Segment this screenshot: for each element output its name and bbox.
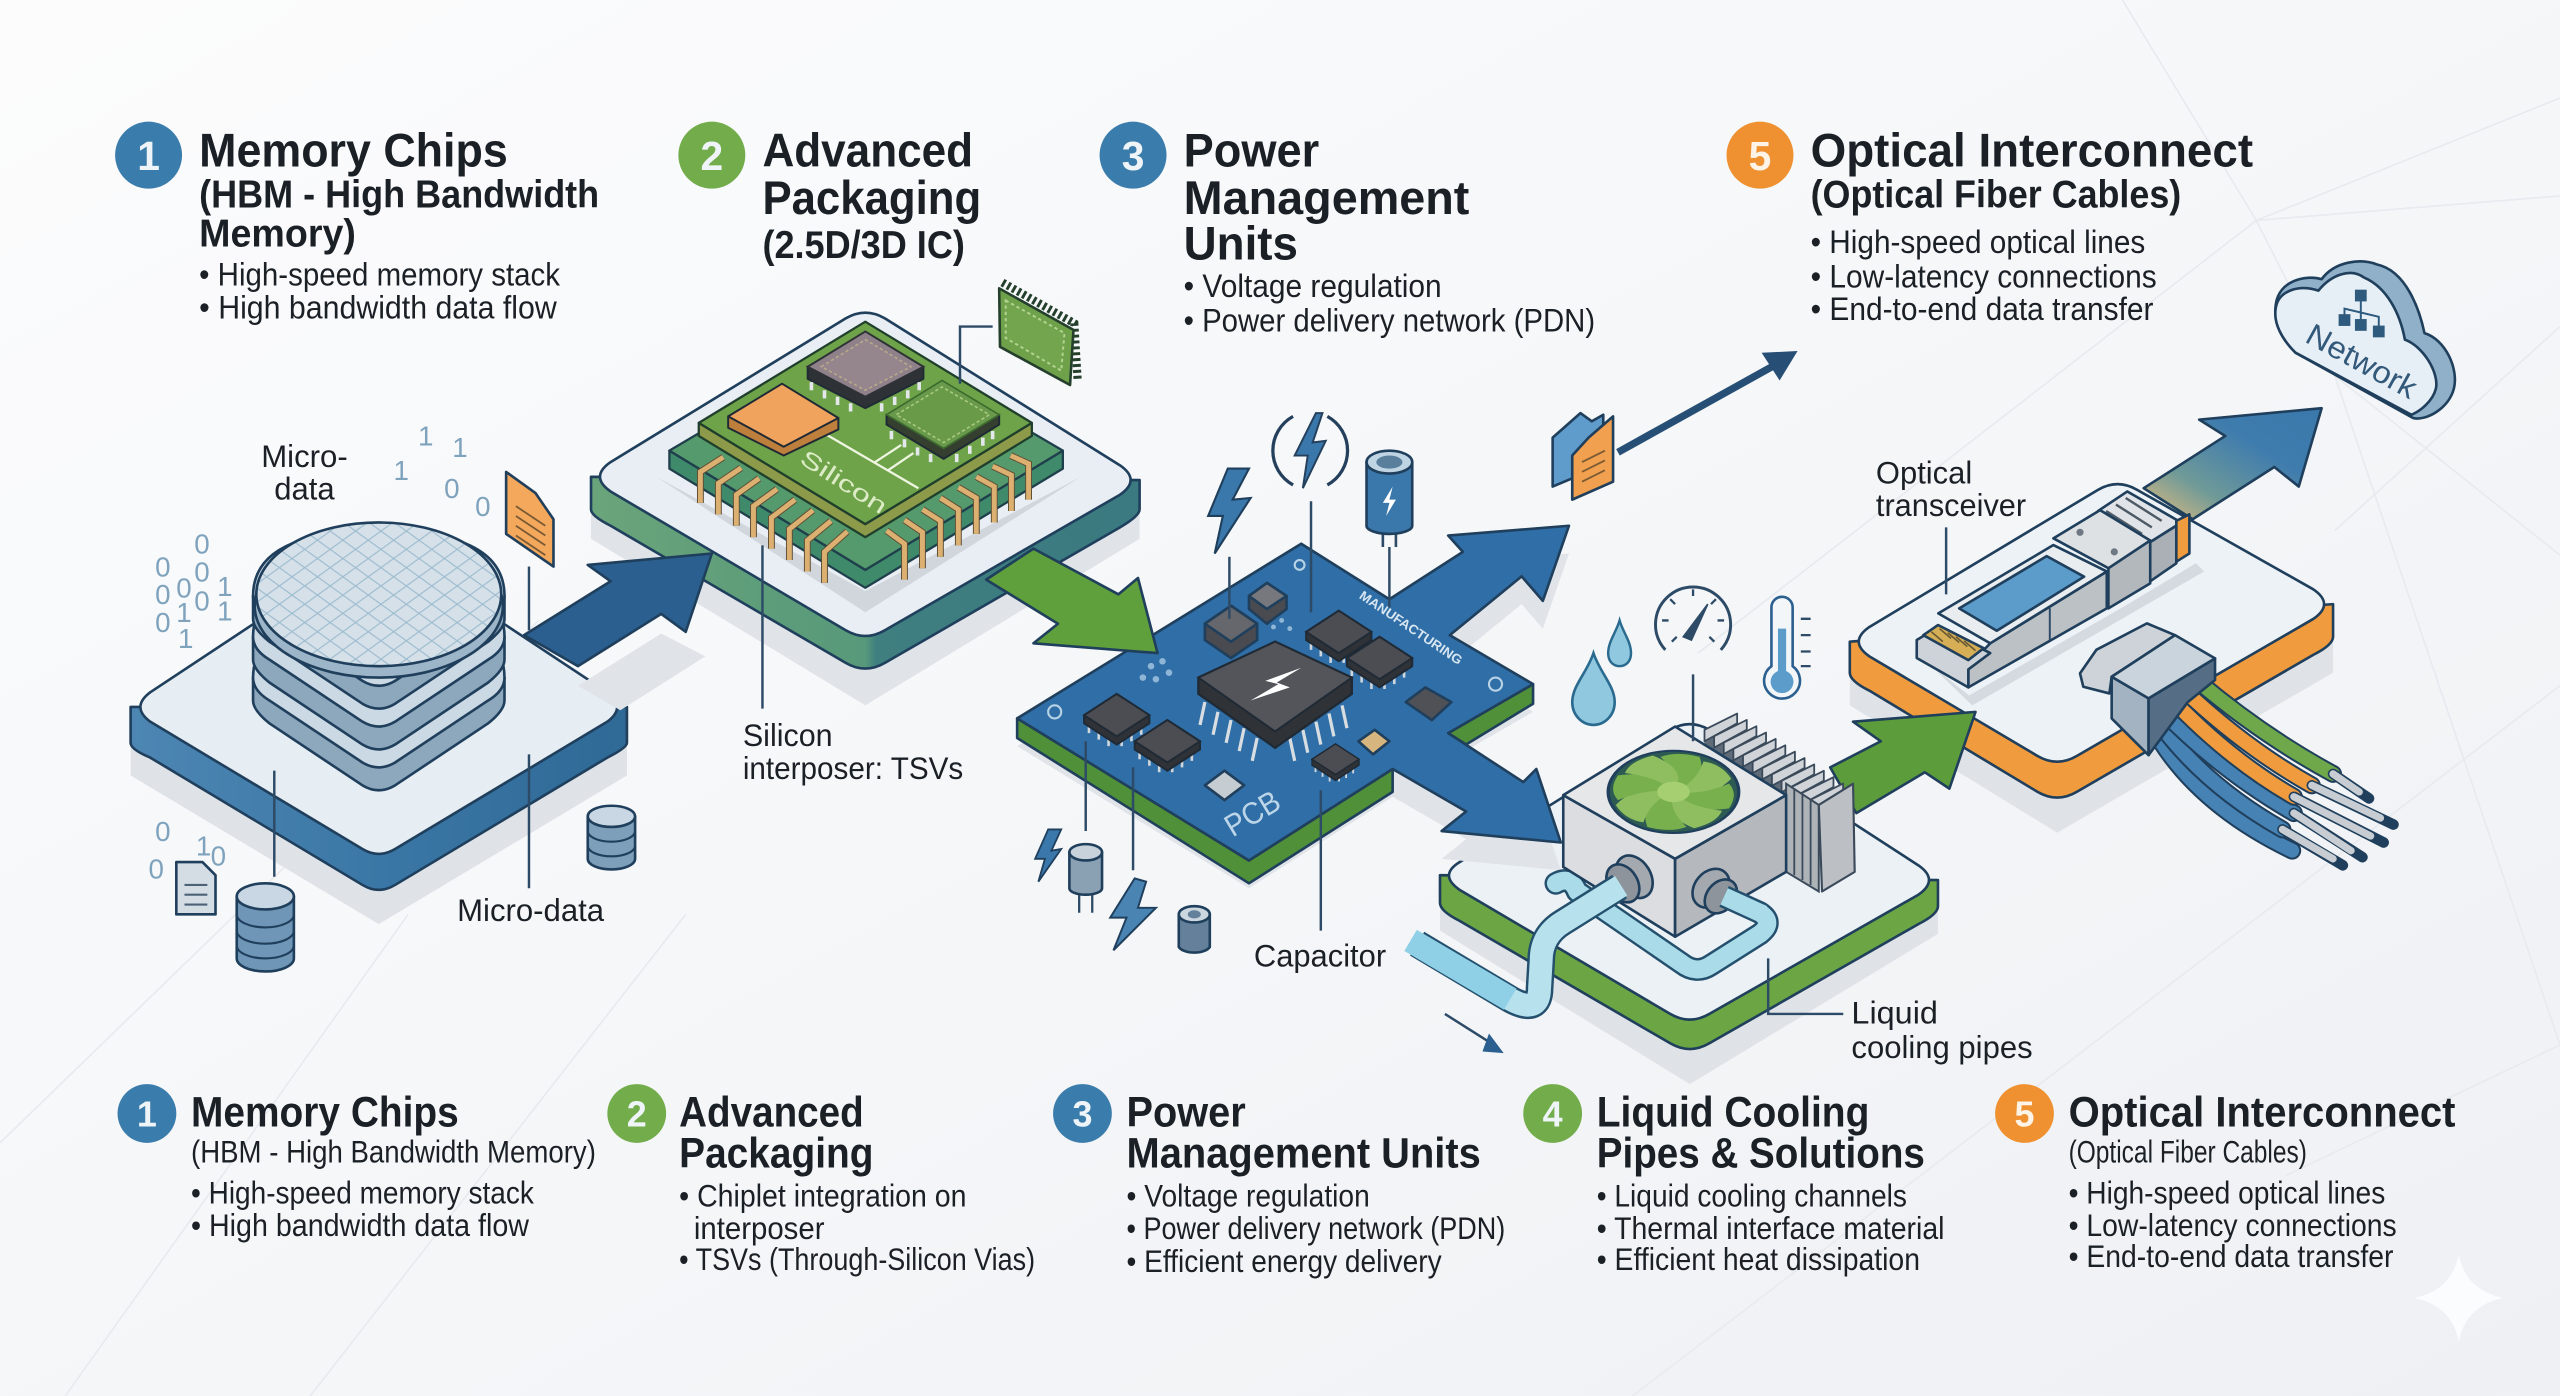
- top heading 1: memory chips: Memory): [199, 213, 356, 256]
- top heading 5: optical interconnect: [1727, 122, 2253, 327]
- legend 4: liquid cooling: [1523, 1084, 1944, 1277]
- binary digits: 0: [149, 853, 164, 884]
- network tree glyph: [2340, 291, 2384, 336]
- icon: small green chip: [999, 282, 1078, 385]
- binary digits: 1: [217, 571, 233, 602]
- pcb small chips: [1084, 611, 1412, 782]
- binary digits: 1: [178, 623, 193, 654]
- arrow: to optical interconnect: [1618, 351, 1798, 452]
- icon: gray document: [176, 862, 216, 914]
- legend badge 2: [607, 1084, 666, 1143]
- legend 1: memory chips: • High bandwidth data flow: [191, 1208, 530, 1243]
- top heading 1: memory chips: [115, 122, 599, 325]
- legend 1: memory chips: [118, 1084, 596, 1243]
- icon: database right: [588, 806, 635, 869]
- top heading 2: advanced packaging: Packaging: [762, 172, 981, 225]
- pcb cube components: [1205, 583, 1451, 800]
- binary digits: 1: [217, 595, 233, 626]
- pipes: liquid cooling tubes: [1556, 881, 1767, 969]
- binary digits: 0: [194, 529, 210, 560]
- diagram label: optical transceiver: [1876, 455, 2026, 523]
- fibers: [2162, 681, 2333, 851]
- top heading 1: memory chips: • High bandwidth data flow: [199, 288, 557, 325]
- icon: gauge: [1656, 587, 1731, 650]
- panel: memory chips platform: [131, 547, 627, 924]
- arrow: cooling to optical: [1830, 712, 1976, 813]
- pcb mounting holes: [1048, 560, 1502, 718]
- transceiver body: [1968, 571, 2107, 687]
- icon: heat sink: [1704, 714, 1855, 891]
- stack layer 3: [253, 612, 504, 790]
- top heading 3: power management: Power: [1184, 125, 1319, 178]
- fan: [1608, 751, 1739, 833]
- interposer pins: [700, 456, 1029, 583]
- legend badge 3: 3: [1072, 1094, 1092, 1135]
- icon: blue capacitor: [1367, 451, 1412, 547]
- label: PCB: PCB: [1218, 783, 1287, 844]
- pcb trace dots: [1140, 618, 1292, 682]
- badge 3: 3: [1122, 133, 1144, 179]
- arrow: memory to packaging shadow: [578, 634, 705, 710]
- top heading 3: power management: Management: [1184, 172, 1470, 225]
- top heading 5: optical interconnect: (Optical Fiber Cables): [1811, 173, 2181, 216]
- legend 3: power management units: • Power delivery network (PDN): [1127, 1211, 1505, 1246]
- legend 3: power management units: • Efficient energy delivery: [1127, 1244, 1442, 1279]
- panel: optical arrow gradient: [2144, 408, 2322, 519]
- legend 1: memory chips: • High-speed memory stack: [191, 1175, 534, 1210]
- connector housing: [2112, 677, 2149, 755]
- panel: optical interconnect platform: [1850, 484, 2333, 833]
- leader lines: [274, 501, 1946, 1014]
- diagram label: liquid cooling pipes: Liquid: [1851, 996, 1938, 1031]
- binary digits: 1: [418, 421, 433, 452]
- stack layer 1: [253, 531, 504, 709]
- top wafer: [255, 534, 503, 678]
- diagram label: micro-data upper: Micro-: [261, 439, 348, 474]
- legend 2: advanced packaging: Advanced: [679, 1089, 864, 1136]
- top heading 5: optical interconnect: • Low-latency connections: [1811, 257, 2157, 294]
- legend 3: power management units: [1053, 1084, 1505, 1279]
- legend 5: optical interconnect: Optical Interconnect: [2069, 1089, 2456, 1136]
- icon: memory wafer stack: [253, 522, 504, 790]
- legend 2: advanced packaging: • TSVs (Through-Silicon Vias): [679, 1242, 1035, 1277]
- icon: large droplet: [1572, 653, 1615, 725]
- diagram label: liquid cooling pipes: cooling pipes: [1851, 1030, 2033, 1065]
- diagram label: silicon interposer: [743, 718, 963, 786]
- chip: orange die: [728, 384, 838, 456]
- legend 4: liquid cooling: Pipes & Solutions: [1597, 1129, 1925, 1176]
- legend 4: liquid cooling: Liquid Cooling: [1597, 1089, 1869, 1136]
- legend badge 4: [1523, 1084, 1582, 1143]
- connector latch: [2080, 623, 2175, 693]
- binary digits: 1: [196, 831, 211, 862]
- legend badge 3: [1053, 1084, 1112, 1143]
- icon: orange document: [506, 472, 553, 567]
- diagram label: capacitor: Capacitor: [1254, 939, 1386, 974]
- top heading 5: optical interconnect: • High-speed optical lines: [1811, 223, 2145, 260]
- top heading 5: optical interconnect: Optical Interconnect: [1811, 125, 2253, 178]
- badge 5: [1727, 122, 1793, 189]
- legend 4: liquid cooling: • Liquid cooling channels: [1597, 1179, 1907, 1214]
- panel: liquid cooling platform: [1440, 724, 1938, 1084]
- legend badge 1: [118, 1084, 176, 1143]
- legend badge 2: 2: [627, 1094, 647, 1135]
- legend 5: optical interconnect: • End-to-end data transfer: [2069, 1239, 2393, 1274]
- binary digits: 0: [194, 556, 210, 587]
- top heading 2: advanced packaging: Advanced: [762, 125, 973, 178]
- fiber tips: [2282, 774, 2393, 865]
- legend 5: optical interconnect: (Optical Fiber Cables): [2069, 1134, 2307, 1169]
- panel: PCB board with arrows: [1017, 526, 1569, 888]
- legend 3: power management units: • Voltage regulation: [1127, 1179, 1370, 1214]
- legend 3: power management units: Management Units: [1127, 1129, 1481, 1176]
- legend badge 1: 1: [137, 1094, 157, 1135]
- arrow: coolant flow: [1445, 1014, 1504, 1053]
- icon: thermometer: [1764, 597, 1811, 699]
- binary digits: 0: [475, 491, 491, 522]
- binary digits: 0: [176, 573, 192, 604]
- label: board marking: Silicon: [796, 444, 892, 519]
- top heading 5: optical interconnect: • End-to-end data transfer: [1811, 290, 2154, 327]
- leader: small chip: [960, 327, 993, 384]
- diagram label: liquid cooling pipes: [1851, 996, 2033, 1065]
- top heading 1: memory chips: (HBM - High Bandwidth: [199, 173, 599, 216]
- icon: database left: [237, 883, 294, 971]
- icon: gray capacitor: [1069, 844, 1102, 913]
- pipe connectors: [1600, 849, 1744, 920]
- legend 2: advanced packaging: interposer: [694, 1211, 824, 1246]
- binary digits: 0: [194, 586, 210, 617]
- icon: document pair: [1553, 413, 1613, 500]
- binary digits: 0: [155, 816, 171, 847]
- binary digits: 1: [176, 597, 192, 628]
- legend badge 5: [1995, 1084, 2054, 1143]
- icon: fiber connector and cables: [2080, 623, 2393, 865]
- stack layer 2: [253, 571, 504, 749]
- icon: sparkle watermark: [2415, 1254, 2503, 1342]
- badge 2: [678, 122, 745, 189]
- icon: network cloud: [2275, 261, 2455, 419]
- diagram label: silicon interposer: interposer: TSVs: [743, 751, 963, 786]
- pipe: right connector stub: [1724, 896, 1763, 914]
- binary digits: 0: [155, 551, 171, 582]
- diagram label: micro-data upper: [261, 439, 348, 507]
- icon: optical transceiver: [1917, 491, 2204, 705]
- legend badge 4: 4: [1543, 1094, 1563, 1135]
- badge 1: [115, 122, 182, 189]
- legend 2: advanced packaging: • Chiplet integration on: [679, 1179, 967, 1214]
- network label: Network: [2300, 317, 2423, 406]
- label: tiny board print: MANUFACTURING: [1357, 588, 1465, 668]
- top heading 2: advanced packaging: [678, 122, 981, 267]
- top heading 3: power management: • Voltage regulation: [1184, 267, 1442, 304]
- icon: power lightning left: [1208, 469, 1251, 554]
- badge 2: 2: [700, 133, 723, 179]
- legend 5: optical interconnect: [1995, 1084, 2456, 1274]
- arrow: memory to packaging: [524, 554, 712, 666]
- top heading 1: memory chips: Memory Chips: [199, 125, 508, 178]
- badge 5: 5: [1749, 133, 1771, 179]
- binary digits: 0: [155, 607, 171, 638]
- legend 4: liquid cooling: • Efficient heat dissipation: [1597, 1242, 1920, 1277]
- diagram label: optical transceiver: transceiver: [1876, 488, 2026, 523]
- badge 3: [1100, 122, 1167, 189]
- top heading 3: power management: Units: [1184, 218, 1298, 271]
- legend 5: optical interconnect: • High-speed optical lines: [2069, 1175, 2385, 1210]
- top heading 2: advanced packaging: (2.5D/3D IC): [762, 224, 965, 267]
- packaged chip assembly: [656, 322, 1081, 612]
- icon: lower lightning large: [1110, 878, 1156, 950]
- legend 2: advanced packaging: Packaging: [679, 1129, 873, 1176]
- binary digits: 0: [155, 579, 171, 610]
- binary digits: [149, 421, 491, 884]
- pcb main chip: [1198, 642, 1352, 761]
- legend 3: power management units: Power: [1127, 1089, 1246, 1136]
- legend badge 5: 5: [2014, 1094, 2034, 1135]
- binary digits: 1: [393, 455, 409, 486]
- diagram label: micro-data lower: Micro-data: [457, 893, 605, 928]
- binary digits: 0: [444, 473, 460, 504]
- transceiver cage: [2108, 540, 2150, 608]
- pipe: main coolant inlet: [1411, 886, 1621, 1005]
- chip: green die: [887, 380, 999, 462]
- icon: circled lightning: [1273, 413, 1348, 488]
- legend 1: memory chips: Memory Chips: [191, 1089, 459, 1136]
- chip: purple die: [808, 331, 923, 411]
- top heading 3: power management: [1100, 122, 1595, 338]
- badge 1: 1: [137, 133, 160, 179]
- icon: cooling block with fan: [1563, 727, 1786, 937]
- legend 2: advanced packaging: [607, 1084, 1035, 1277]
- icon: small cylinder: [1179, 906, 1210, 953]
- top heading 1: memory chips: • High-speed memory stack: [199, 256, 561, 293]
- binary digits: 1: [452, 432, 468, 463]
- legend 1: memory chips: (HBM - High Bandwidth Memory): [191, 1134, 596, 1169]
- icon: lower lightning small: [1035, 829, 1061, 882]
- panel: advanced packaging platform: [591, 313, 1140, 705]
- legend 5: optical interconnect: • Low-latency connections: [2069, 1208, 2397, 1243]
- transceiver rear port: [2098, 491, 2181, 542]
- diagram label: micro-data upper: data: [274, 472, 335, 507]
- diagram label: optical transceiver: Optical: [1876, 455, 1972, 490]
- top heading 3: power management: • Power delivery network (PDN): [1184, 301, 1595, 338]
- binary digits: 0: [211, 840, 226, 871]
- diagram label: silicon interposer: Silicon: [743, 718, 833, 753]
- icon: small droplet: [1608, 620, 1631, 666]
- arrow: packaging to PCB: [986, 549, 1158, 653]
- legend 4: liquid cooling: • Thermal interface material: [1597, 1211, 1944, 1246]
